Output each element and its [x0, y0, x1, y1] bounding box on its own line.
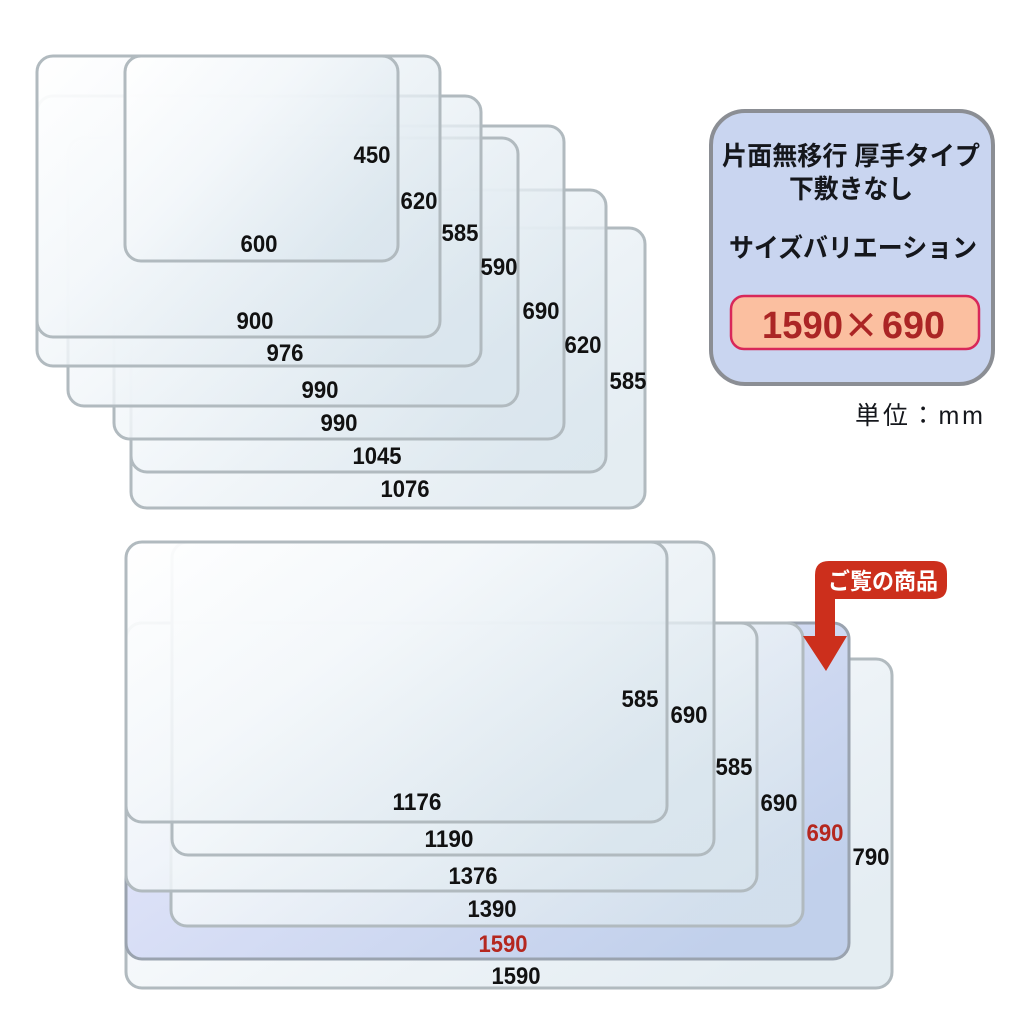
bottom stack dimension labels: 1390 — [468, 896, 516, 923]
size badge: 1590 — [762, 305, 843, 347]
bottom stack dimension labels: 1590 — [478, 931, 528, 958]
bottom stack dimension labels: 690 — [806, 820, 844, 847]
sheet 1390 x 690 — [171, 623, 803, 926]
bottom stack dimension labels: 585 — [622, 686, 658, 713]
size badge — [731, 296, 979, 349]
info panel — [711, 111, 993, 384]
bottom stack dimension labels: 1190 — [424, 826, 474, 853]
sheet 990 x 690 — [114, 126, 564, 439]
top stack dimension labels: 600 — [240, 231, 278, 258]
top stack dimension labels: 585 — [610, 368, 646, 395]
top stack dimension labels: 590 — [480, 254, 518, 281]
top stack dimension labels: 620 — [564, 332, 602, 359]
panel heading: 片面無移行 厚手タイプ — [722, 141, 980, 171]
sheet 976 x 585 — [37, 96, 481, 366]
top stack dimension labels: 900 — [236, 308, 274, 335]
sheet 1590 x 790 — [126, 659, 892, 988]
sheet 990 x 590 — [68, 138, 518, 406]
sheet 1190 x 690 — [172, 542, 714, 855]
bottom stack dimension labels — [392, 686, 890, 990]
callout arrow: selected product — [803, 561, 947, 671]
size badge: × — [843, 297, 879, 349]
sheet 1045 x 620 — [131, 190, 606, 472]
bottom stack dimension labels: 790 — [852, 844, 890, 871]
sheet 1376 x 585 — [126, 623, 757, 891]
top stack dimension labels: 450 — [354, 142, 390, 169]
top stack dimension labels — [236, 142, 646, 503]
sheet 1176 x 585 — [126, 542, 667, 822]
highlighted sheet 1590 x 690 — [126, 623, 849, 959]
bottom stack dimension labels: 1176 — [392, 789, 442, 816]
bottom stack dimension labels: 690 — [670, 702, 708, 729]
sheet 900 x 620 — [37, 56, 440, 337]
bottom stack dimension labels: 1590 — [492, 963, 540, 990]
top stack dimension labels: 620 — [400, 188, 438, 215]
top sheet stack — [37, 56, 645, 508]
top stack dimension labels: 1076 — [380, 476, 430, 503]
top stack dimension labels: 1045 — [352, 443, 402, 470]
bottom stack dimension labels: 585 — [716, 754, 752, 781]
callout arrow: selected product: ご覧の商品 — [828, 568, 938, 594]
top stack dimension labels: 690 — [522, 298, 560, 325]
bottom stack dimension labels: 1376 — [448, 863, 498, 890]
sheet 600 x 450 — [125, 56, 398, 261]
top stack dimension labels: 976 — [266, 340, 304, 367]
sheet 1076 x 585 — [131, 228, 645, 508]
top stack dimension labels: 585 — [442, 220, 478, 247]
top stack dimension labels: 990 — [302, 377, 338, 404]
bottom stack dimension labels: 690 — [760, 790, 798, 817]
panel subheading: 下敷きなし — [789, 174, 913, 204]
bottom sheet stack — [126, 542, 892, 988]
panel variation title: サイズバリエーション — [729, 233, 977, 263]
top stack dimension labels: 990 — [320, 410, 358, 437]
size badge: 690 — [882, 305, 945, 347]
unit note: 単位：mm — [855, 402, 983, 430]
